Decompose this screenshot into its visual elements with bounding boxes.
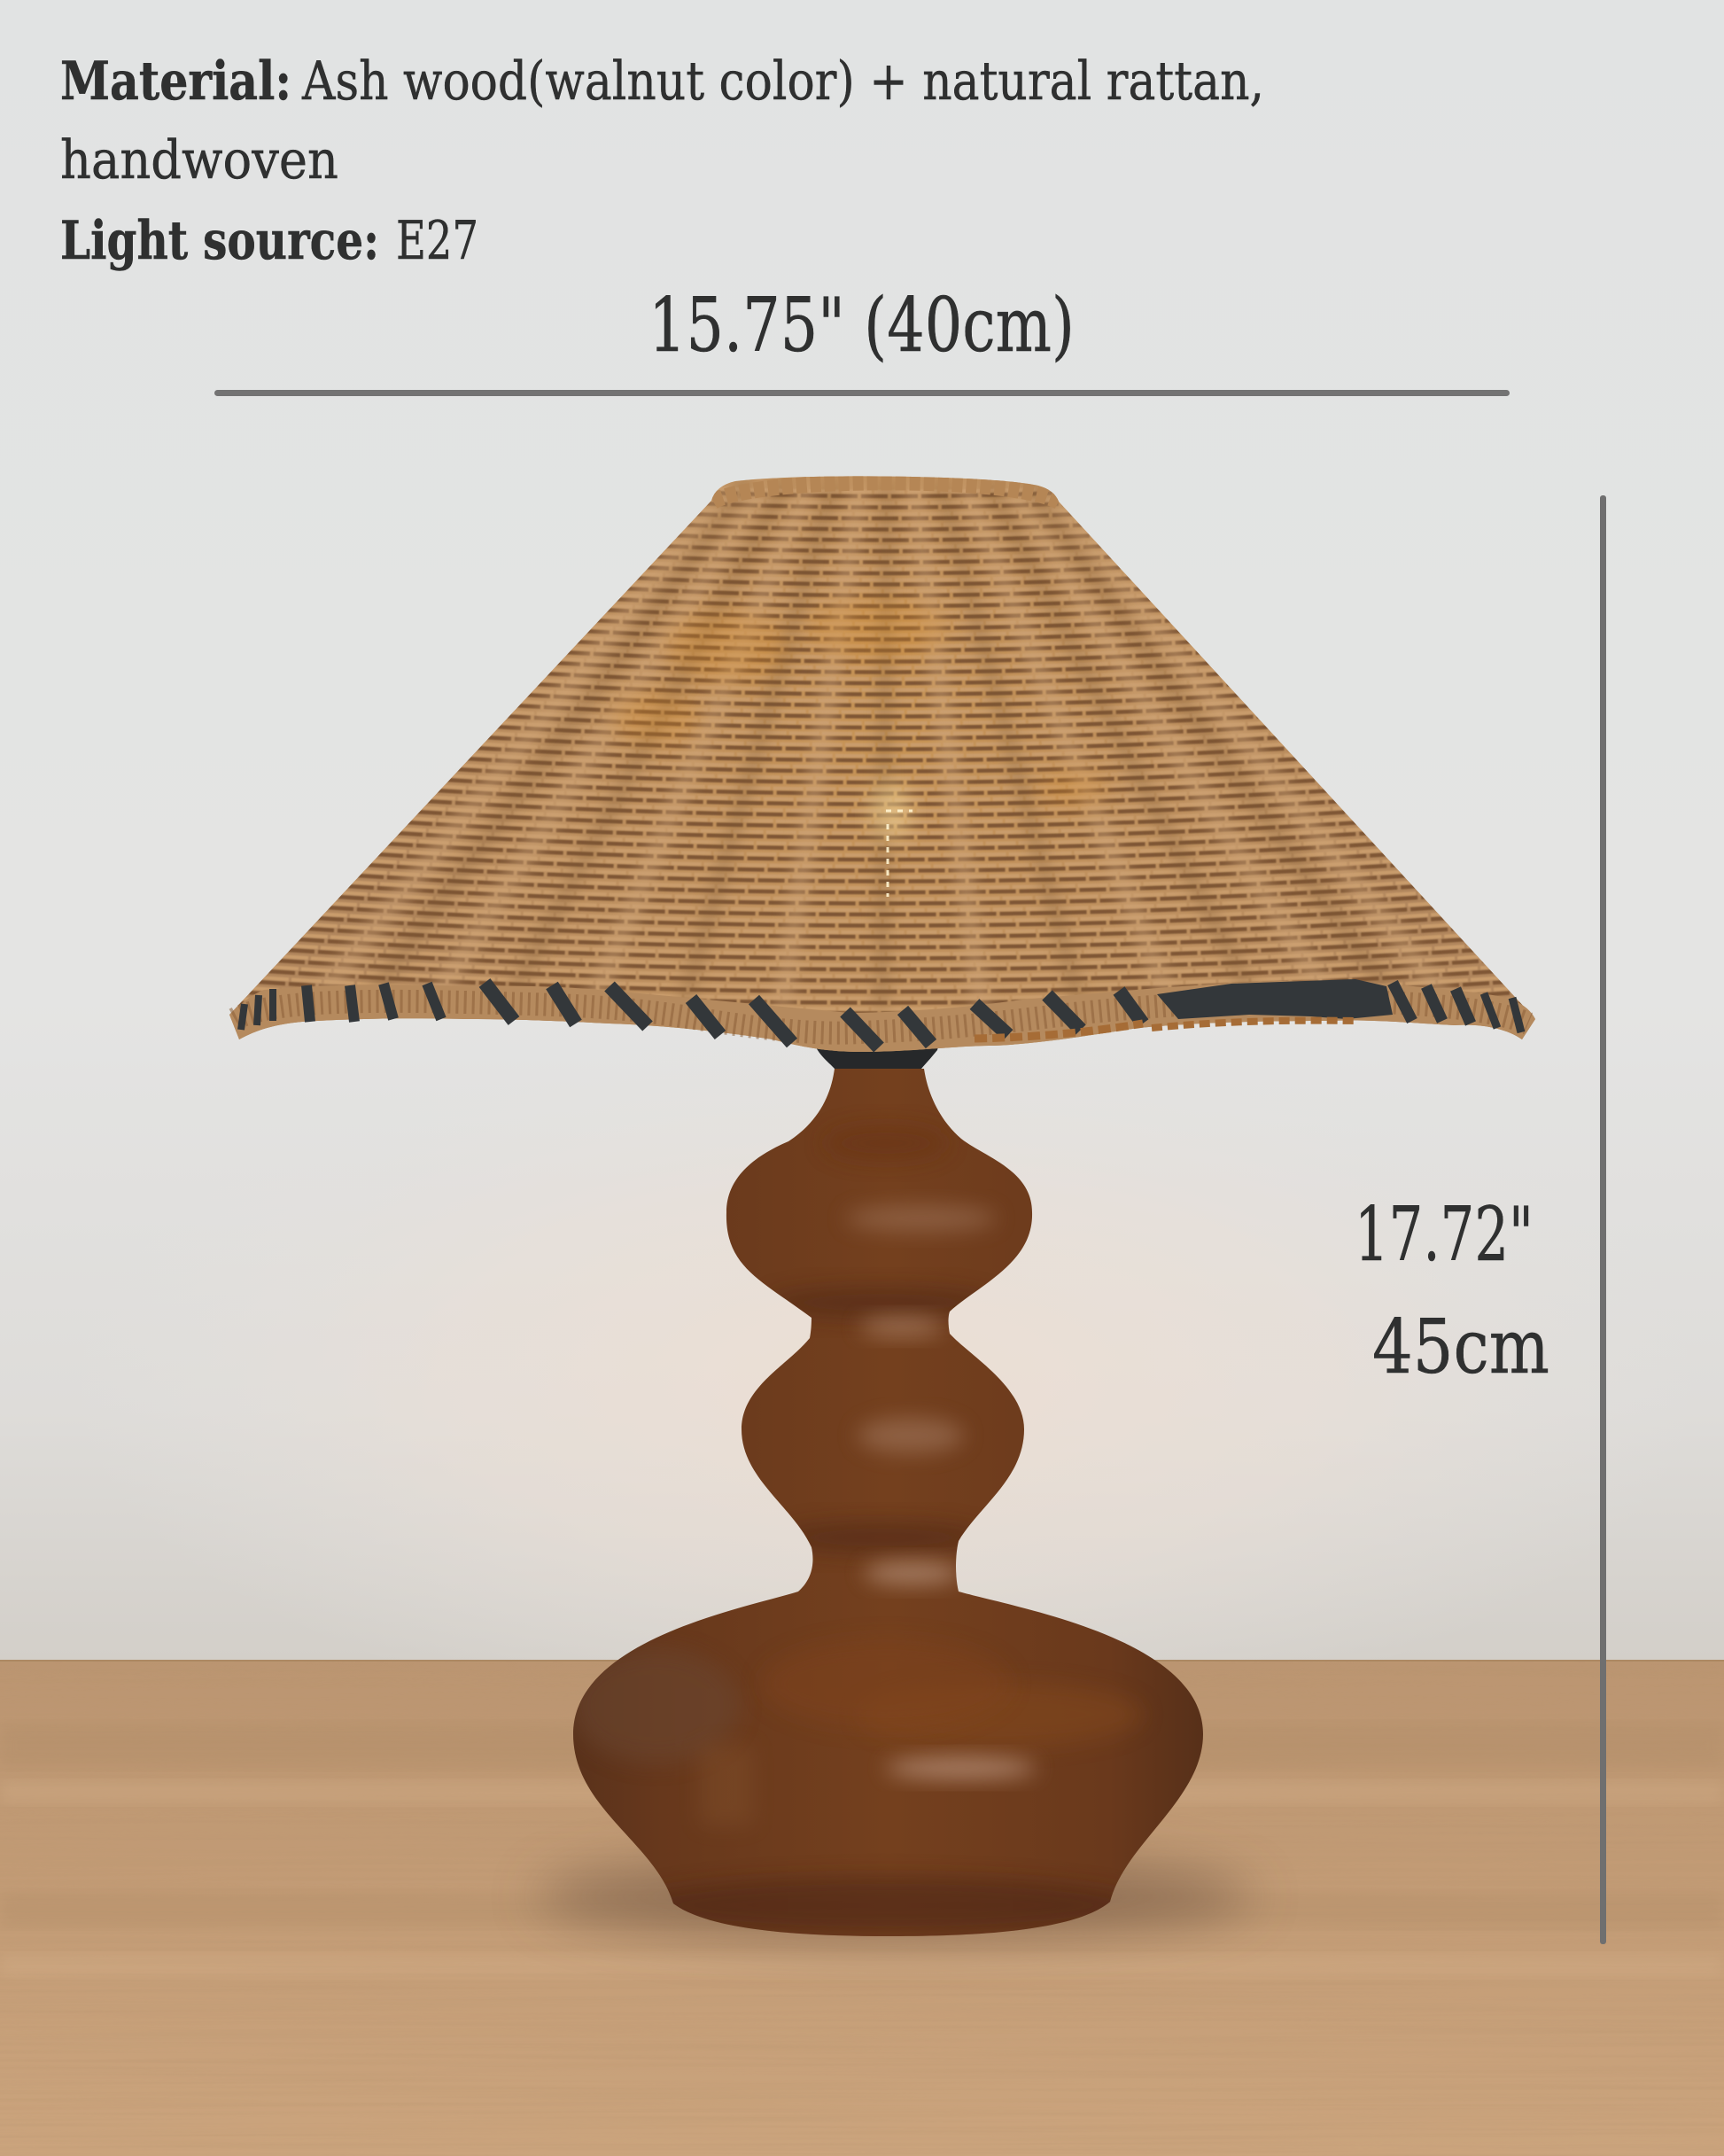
wooden lamp base [571,1069,1203,1936]
width line [214,390,1510,396]
lamp shadow on table [536,1854,1254,1939]
width label: 15.75" (40cm) [648,282,1075,369]
specification text block [60,51,1264,272]
width dimension [214,282,1510,396]
height label centimetres: 45cm [1372,1304,1549,1390]
lamp socket [812,1037,941,1069]
height line [1600,495,1606,1944]
weave ribs [308,483,1455,1010]
amber light patches [611,598,1107,806]
material line: handwoven [60,129,338,191]
material line: Ash wood(walnut color) + natural rattan, [301,51,1264,113]
material line: Material: [60,51,291,113]
rattan lampshade [221,470,1550,1063]
material line [60,51,1264,191]
light source line: E27 [396,210,478,272]
lamp [221,470,1550,1936]
bulb glint [871,781,912,897]
wooden table [0,1660,1724,2156]
light source line: Light source: [60,210,379,272]
shade top rim [713,482,1059,502]
height label inches: 17.72" [1355,1191,1534,1278]
warm light glow on wall [71,1028,1701,1737]
weave shadow valleys [361,483,1402,1010]
weave rows [239,488,1526,1024]
wall background [0,0,1724,1660]
braided rim [229,979,1535,1052]
height dimension [1355,495,1606,1944]
